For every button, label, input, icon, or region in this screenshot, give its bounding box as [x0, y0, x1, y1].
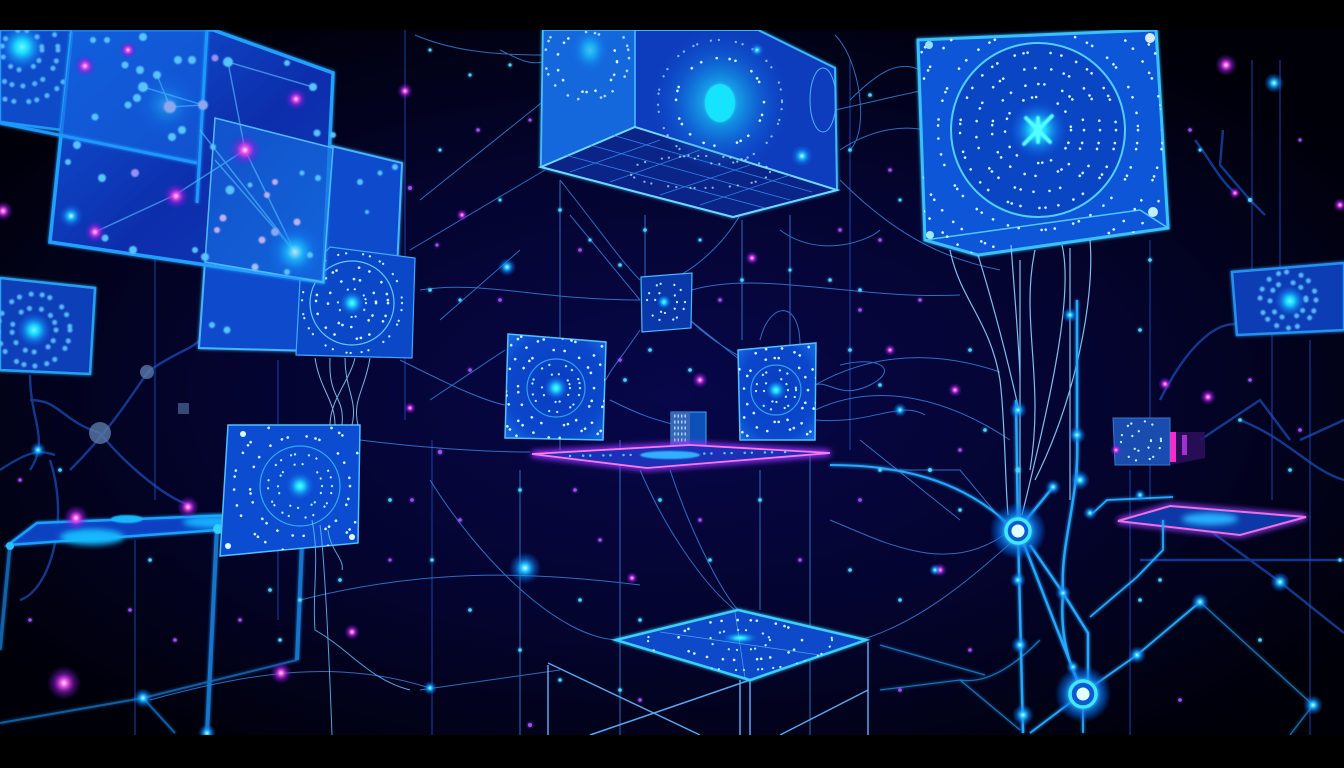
panel: small centre top square — [641, 273, 692, 332]
panel: bottom glowing platform with stand — [548, 610, 868, 735]
panel: top right cube — [914, 30, 1172, 259]
panel: centre right square — [737, 342, 817, 441]
panel: left middle — [0, 278, 95, 374]
scattered blurred dots on glass panels — [65, 33, 398, 334]
network lines: centre web — [150, 35, 1020, 735]
strands above lower left square — [315, 358, 370, 425]
panel: lower left square — [220, 420, 366, 556]
icon: network hub lower — [1055, 666, 1111, 722]
icon: tiny centre cube — [671, 412, 706, 445]
left wireframe table — [0, 520, 303, 733]
panel: big glass panel upper left — [0, 30, 398, 334]
panel: centre pink platform — [532, 445, 830, 468]
strands under top right cube — [950, 240, 1091, 520]
panel: right small cube — [1113, 418, 1205, 465]
icon: network hub upper — [990, 503, 1046, 559]
panel: top centre box — [541, 16, 837, 217]
panel: right pink platform — [1118, 506, 1306, 535]
panel: back panel left — [199, 118, 415, 358]
panel: centre left square — [504, 333, 607, 441]
dim node paths: far left and far right — [0, 130, 1344, 633]
hub connections lower right — [830, 300, 1313, 735]
panel: left tilted platform — [6, 512, 310, 550]
panel: top-left corner — [0, 30, 70, 133]
scattered small violet particles — [18, 118, 1302, 727]
grey nodes left — [89, 365, 189, 444]
panel: right middle — [1232, 263, 1344, 335]
strands below lower left square — [312, 520, 410, 735]
